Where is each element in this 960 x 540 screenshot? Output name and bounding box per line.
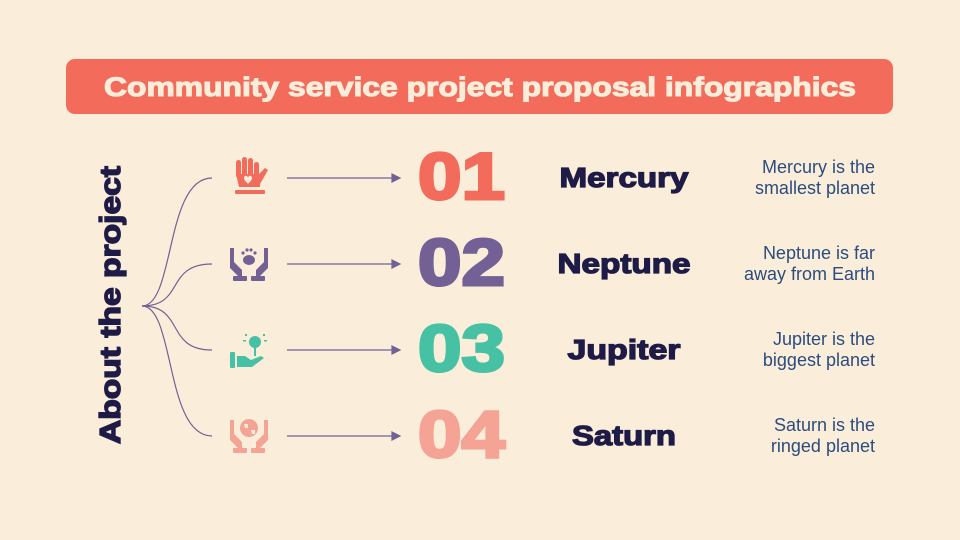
row 3: Jupiter is the (773, 329, 875, 349)
row 3: 03 (418, 311, 505, 385)
row 4: Saturn is the (774, 415, 875, 435)
row 2 (418, 225, 875, 299)
row 4: Saturn (572, 420, 676, 451)
branch connector lines (142, 178, 212, 436)
row 4 (418, 397, 875, 471)
icon: hands with globe (230, 419, 268, 453)
row 4: ringed planet (771, 436, 875, 456)
row 2: away from Earth (744, 264, 875, 284)
row 1: number, name, description: Mercury (560, 162, 689, 193)
row 2: 02 (418, 225, 505, 299)
row 1: number, name, description (418, 139, 875, 213)
row 1: number, name, description: 01 (418, 139, 505, 213)
row 3 (418, 311, 875, 385)
row 4: 04 (418, 397, 505, 471)
icon: hand with heart (235, 157, 268, 194)
row 1: number, name, description: Mercury is the (762, 157, 875, 177)
title bar: Community service project proposal infographics (104, 72, 856, 102)
row 1: number, name, description: smallest planet (755, 178, 875, 198)
row 2: Neptune (558, 248, 690, 279)
title bar (66, 59, 893, 114)
vertical heading: About the project (95, 166, 127, 444)
icon: hands with paw (230, 248, 268, 281)
row 2: Neptune is far (763, 243, 875, 263)
row 3: Jupiter (568, 334, 681, 365)
row 3: biggest planet (763, 350, 875, 370)
icon: hand with plant (230, 334, 267, 368)
arrows (287, 174, 400, 440)
